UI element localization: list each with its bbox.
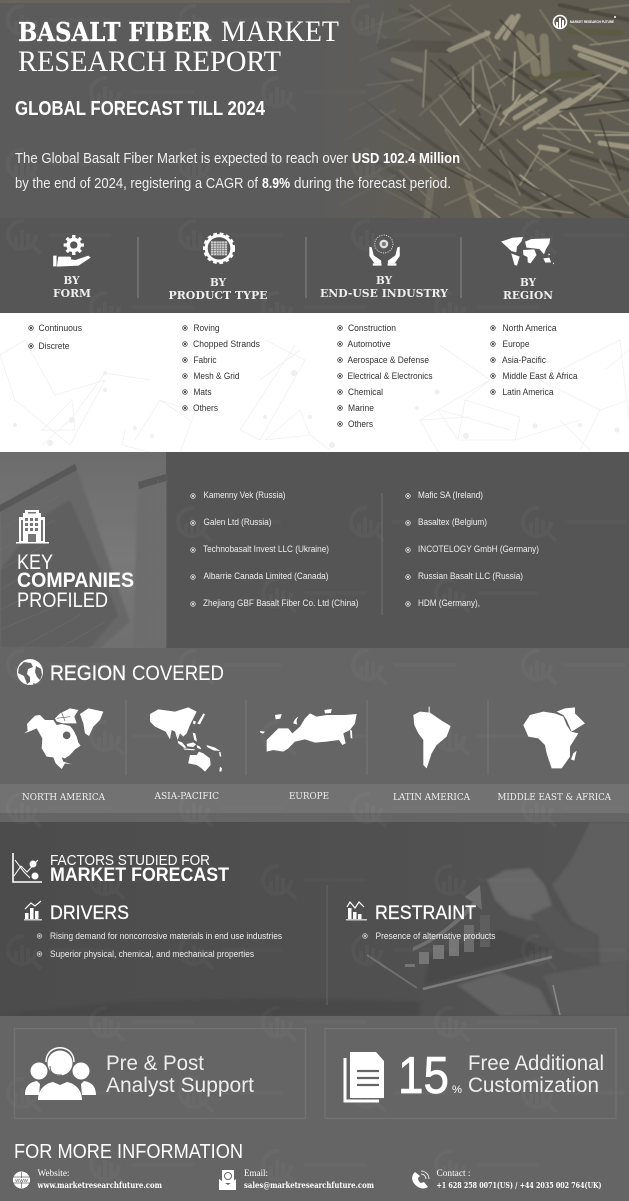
map: middle east and africa <box>523 707 585 768</box>
list: region: Asia-Pacific <box>502 355 546 365</box>
list: region: Middle East & Africa <box>502 371 578 381</box>
text block: market summary: during the forecast period. <box>294 175 451 192</box>
list: companies column 2: Mafic SA (Ireland) <box>418 490 483 500</box>
text block: market summary: by the end of 2024, registering a CAGR of <box>15 175 259 192</box>
labels: regions: EUROPE <box>289 792 329 802</box>
list: form: Discrete <box>38 341 70 351</box>
heading: for more information: FOR MORE INFORMATION <box>14 1141 243 1163</box>
heading: region covered <box>50 662 224 685</box>
title: BASALT FIBER <box>18 18 211 48</box>
list: form: Continuous <box>38 323 82 333</box>
list: product type: Fabric <box>194 355 217 365</box>
labels: regions: ASIA-PACIFIC <box>154 792 219 802</box>
text: pre and post analyst support: Analyst Support <box>106 1073 254 1097</box>
icon: globe <box>17 659 43 686</box>
panel: segment lists background <box>0 313 629 455</box>
panel: segment band background <box>0 218 629 313</box>
icon: company logo <box>554 16 616 28</box>
map: europe <box>260 709 357 752</box>
labels: regions: LATIN AMERICA <box>393 793 470 803</box>
list: restraint: Presence of alternative products <box>376 931 496 941</box>
panel: factors studied <box>13 852 496 1005</box>
panel: free customization <box>325 1028 616 1118</box>
list: drivers <box>37 931 282 959</box>
icon: office building <box>16 510 49 544</box>
list: form <box>29 323 82 351</box>
labels: regions: NORTH AMERICA <box>22 793 105 803</box>
heading: key companies profiled: KEY <box>17 551 53 574</box>
list: end-use industry: Aerospace & Defense <box>348 355 429 365</box>
heading: region covered: COVERED <box>132 662 224 685</box>
title: RESEARCH REPORT <box>18 45 281 78</box>
heading: by end-use industry: BY <box>376 274 392 287</box>
list: product type: Mats <box>194 387 212 397</box>
heading: key companies profiled: PROFILED <box>17 589 108 612</box>
icon: restraint chart <box>346 902 367 920</box>
contact: email: sales@marketresearchfuture.com <box>244 1180 374 1190</box>
heading: by product type <box>168 276 268 302</box>
heading: restraint: RESTRAINT <box>375 903 476 924</box>
icon: documents <box>345 1052 384 1101</box>
panel: segment headings <box>53 234 554 302</box>
list: end-use industry: Construction <box>348 323 396 333</box>
heading: drivers: DRIVERS <box>50 903 129 924</box>
icon: hands with gear <box>369 235 400 266</box>
subtitle: GLOBAL FORECAST TILL 2024 <box>15 98 266 120</box>
icon: hand with gear <box>53 235 91 267</box>
icon: www globe <box>13 1172 30 1188</box>
contact: website: Website: <box>38 1169 70 1179</box>
stat: 15 percent: % <box>452 1084 462 1096</box>
list: companies column 1 <box>191 490 358 608</box>
heading: by end-use industry: END-USE INDUSTRY <box>320 287 448 300</box>
list: companies column 1: Technobasalt Invest LLC (Ukraine) <box>203 544 329 554</box>
list: companies column 2: INCOTELOGY GmbH (Germany) <box>418 544 539 554</box>
heading: factors studied for market forecast: MARKET FORECAST <box>50 864 229 886</box>
list: product type: Roving <box>194 323 220 333</box>
heading: by form: FORM <box>53 287 91 300</box>
panel: region covered <box>17 659 611 803</box>
stat: 15 percent: 15 <box>398 1047 449 1105</box>
panel: analyst support <box>14 1028 306 1118</box>
panel: bottom background <box>0 1016 629 1201</box>
text: free additional customization <box>468 1051 604 1097</box>
panel: factors background <box>0 822 629 1016</box>
list: companies column 1: Kamenny Vek (Russia) <box>204 490 286 500</box>
list: companies column 2: HDM (Germany), <box>418 598 480 608</box>
heading: by region: BY <box>520 276 536 289</box>
text: free additional customization: Customization <box>468 1073 599 1097</box>
list: product type: Others <box>193 403 218 413</box>
heading: by product type: BY <box>210 276 226 289</box>
text: pre and post analyst support: Pre & Post <box>106 1051 204 1075</box>
icon: drivers chart <box>24 901 42 920</box>
list: region <box>491 323 578 397</box>
contact: email <box>219 1169 374 1190</box>
text block: market summary: USD 102.4 Million <box>352 150 460 167</box>
heading: factors studied for market forecast <box>50 852 229 886</box>
title: MARKET <box>221 15 339 48</box>
contact: email: Email: <box>244 1169 268 1179</box>
labels: regions: MIDDLE EAST & AFRICA <box>498 793 611 803</box>
contact: phone <box>412 1169 602 1190</box>
list: companies column 1: Galen Ltd (Russia) <box>204 517 272 527</box>
heading: region covered: REGION <box>50 662 126 685</box>
heading: by region <box>503 276 553 302</box>
heading: factors studied for market forecast: FACTORS STUDIED FOR <box>50 852 210 869</box>
list: region: North America <box>502 323 556 333</box>
list: product type: Mesh & Grid <box>194 371 240 381</box>
list: drivers: Superior physical, chemical, and mechanical properties <box>50 949 254 959</box>
icon: www globe: WWW <box>15 1178 29 1183</box>
heading: by end-use industry <box>320 274 448 300</box>
text: free additional customization: Free Additional <box>468 1051 604 1075</box>
panel: key companies background <box>0 452 629 648</box>
icon: phone <box>412 1171 429 1188</box>
list: companies column 1: Albarrie Canada Limited (Canada) <box>204 571 328 581</box>
list: product type <box>183 323 260 413</box>
list: end-use industry <box>338 323 433 429</box>
contact: website: www.marketresearchfuture.com <box>37 1180 162 1190</box>
map: north america <box>24 708 103 769</box>
heading: key companies profiled: COMPANIES <box>17 569 134 592</box>
labels: regions <box>22 792 611 803</box>
list: companies column 2 <box>406 490 539 608</box>
map: latin america <box>413 707 451 768</box>
panel: key companies heading <box>16 510 134 612</box>
icon: world map <box>501 237 554 266</box>
heading: by region: REGION <box>503 289 553 302</box>
list: companies column 1: Zhejiang GBF Basalt Fiber Co. Ltd (China) <box>203 598 358 608</box>
list: end-use industry: Electrical & Electronics <box>348 371 433 381</box>
list: companies column 2: Russian Basalt LLC (Russia) <box>418 571 523 581</box>
text block: market summary: 8.9% <box>262 175 290 192</box>
heading: by form <box>53 274 91 300</box>
list: product type: Chopped Strands <box>193 339 260 349</box>
text block: market summary: The Global Basalt Fiber Market is expected to reach over <box>15 150 348 167</box>
list: region: Europe <box>502 339 530 349</box>
list: region: Latin America <box>502 387 554 397</box>
icon: gear with fabric <box>204 234 234 263</box>
list: end-use industry: Automotive <box>348 339 390 349</box>
heading: by product type: PRODUCT TYPE <box>168 289 268 302</box>
list: companies column 2: Basaltex (Belgium) <box>418 517 487 527</box>
heading: key companies profiled <box>17 551 134 612</box>
contact: website <box>13 1169 162 1190</box>
text: pre and post analyst support <box>106 1051 254 1097</box>
panel: header <box>0 0 629 218</box>
map: asia-pacific <box>150 707 222 772</box>
list: end-use industry: Chemical <box>348 387 383 397</box>
title <box>18 15 339 78</box>
icon: support team <box>25 1048 96 1100</box>
text block: market summary <box>15 150 460 192</box>
panel: regions background <box>0 648 629 822</box>
list: end-use industry: Others <box>348 419 373 429</box>
icon: envelope <box>219 1170 236 1190</box>
list: end-use industry: Marine <box>348 403 374 413</box>
icon: forecast chart <box>13 853 42 882</box>
heading: by form: BY <box>64 274 80 287</box>
contact: phone: Contact : <box>436 1169 470 1179</box>
icon: company logo: MARKET RESEARCH FUTURE <box>570 19 614 24</box>
list: drivers: Rising demand for noncorrosive materials in end use industries <box>50 931 282 941</box>
